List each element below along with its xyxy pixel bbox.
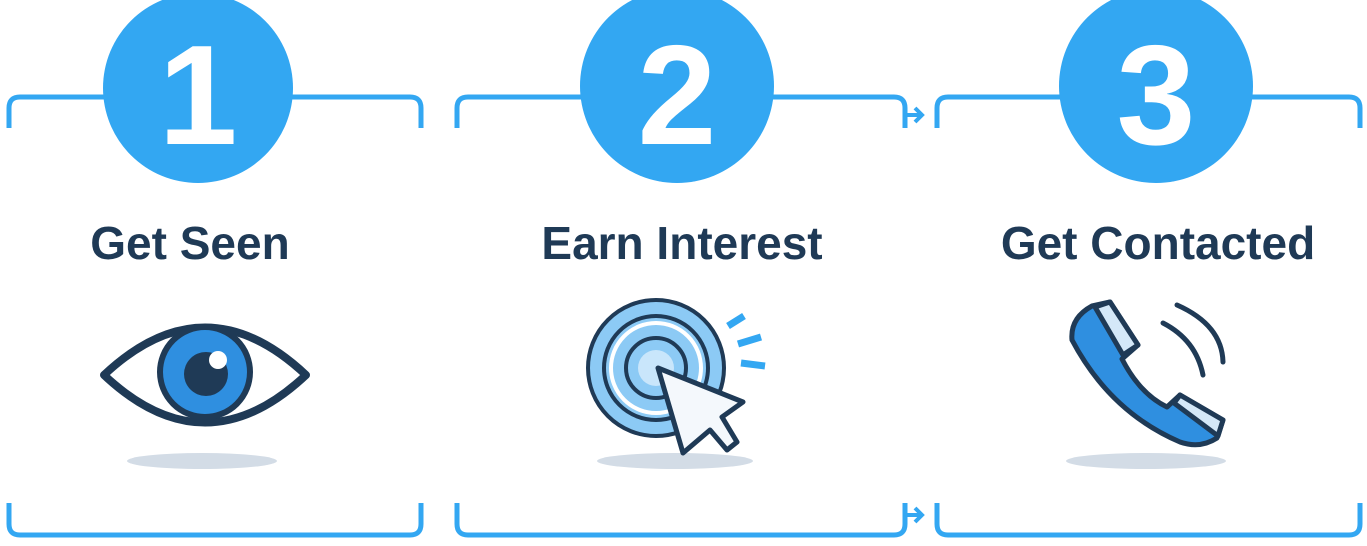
heading: Get Seen: Get Seen — [90, 217, 290, 269]
bottom bracket 1 — [9, 503, 421, 535]
number circle 2 — [580, 0, 774, 183]
top bracket 2 — [457, 97, 905, 128]
heading: Earn Interest: Earn Interest — [541, 217, 823, 269]
arrow: top connector — [905, 108, 922, 122]
heading: Get Contacted: Get Contacted — [1001, 217, 1315, 269]
number circle 1: 1 — [159, 16, 237, 175]
panel: get seen — [9, 0, 421, 535]
top bracket 1 — [9, 97, 421, 128]
panel: earn interest — [457, 0, 905, 535]
icon: target with cursor — [588, 300, 765, 469]
panel: get contacted — [937, 0, 1360, 535]
number circle 3: 3 — [1117, 16, 1195, 175]
number circle 3 — [1059, 0, 1253, 183]
number circle 2: 2 — [638, 16, 716, 175]
arrow: bottom connector — [905, 508, 922, 522]
number circle 1 — [103, 0, 293, 183]
icon: eye — [104, 327, 306, 469]
icon: phone — [1066, 302, 1226, 469]
bottom bracket 3 — [937, 503, 1360, 535]
bottom bracket 2 — [457, 503, 905, 535]
top bracket 3 — [937, 97, 1360, 128]
